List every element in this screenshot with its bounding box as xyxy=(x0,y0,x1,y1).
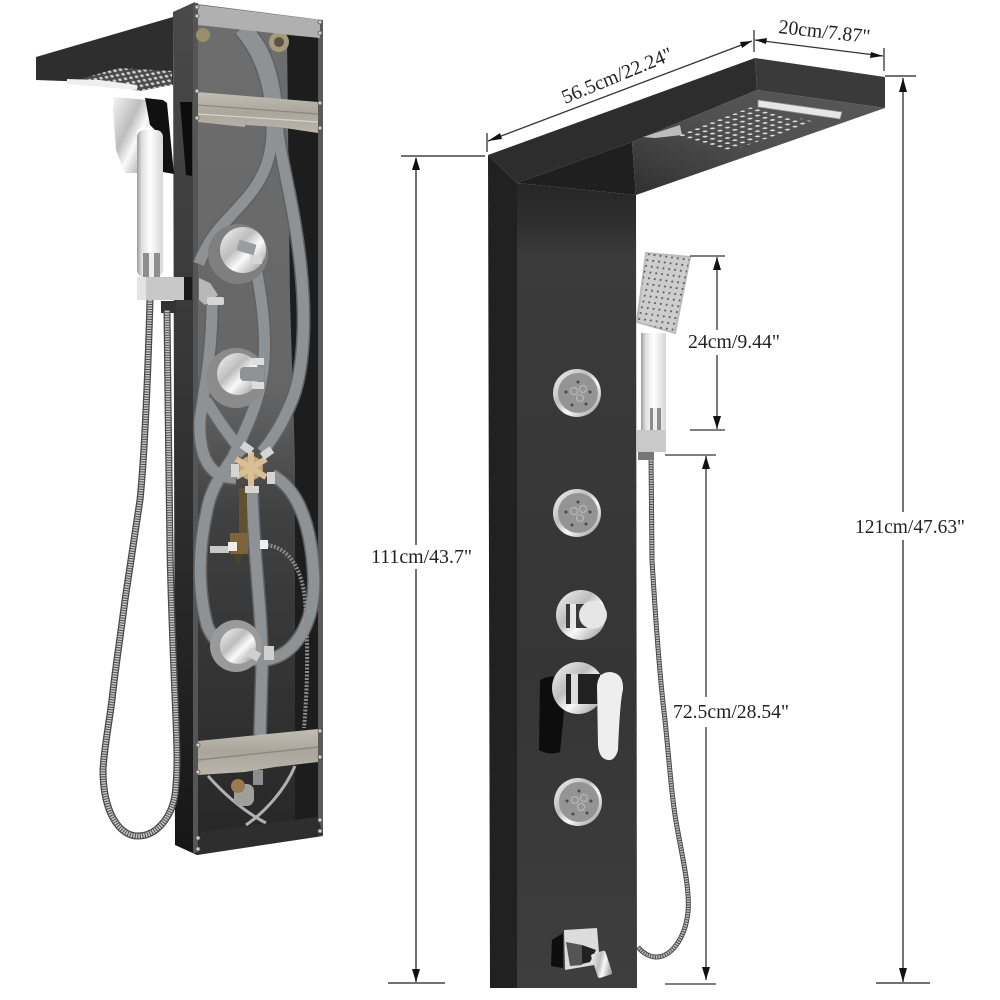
right view: round knob valve xyxy=(556,590,607,640)
dimension: 72.5cm/28.54": 72.5cm/28.54" xyxy=(673,701,789,723)
screws xyxy=(195,5,322,851)
right view: shower panel body xyxy=(488,58,885,988)
left view: side reflection xyxy=(180,102,192,176)
right view: body jet 3 xyxy=(554,778,602,826)
right view: lever mixing valve xyxy=(539,662,623,760)
rain nozzles xyxy=(677,107,815,152)
left view: open back of panel xyxy=(173,2,323,855)
left view: hand shower xyxy=(113,97,192,313)
dimension: 24cm/9.44" xyxy=(688,256,780,430)
inlet fittings xyxy=(196,28,289,52)
chrome rain corner xyxy=(643,125,682,138)
head front edge xyxy=(755,58,885,108)
top bracket xyxy=(198,92,318,133)
right frame edge xyxy=(318,20,323,836)
brass cross fitting xyxy=(231,441,275,493)
waterfall bar xyxy=(758,100,842,119)
panel side wall xyxy=(173,2,197,855)
panel front xyxy=(517,183,637,988)
left view: rain shower head xyxy=(36,17,173,91)
dimension: 111cm/43.7" xyxy=(371,156,485,983)
panel side xyxy=(488,155,517,988)
head underside xyxy=(632,90,885,195)
dimension: 56.5cm/22.24": 56.5cm/22.24" xyxy=(559,43,676,109)
left frame edge xyxy=(193,3,198,853)
upper connector xyxy=(199,278,224,305)
dimension: 20cm/7.87" xyxy=(755,16,884,71)
diverter stem and mixing valve xyxy=(210,488,268,566)
hoses xyxy=(199,30,314,735)
right view: hand shower xyxy=(637,253,690,460)
bottom bracket xyxy=(198,729,318,775)
lower flex hoses and brass connector xyxy=(208,766,295,825)
dark right channel xyxy=(287,35,320,835)
bottom cover strip xyxy=(197,817,323,855)
lower hose clamps xyxy=(246,646,274,661)
right view: flexible hose xyxy=(638,455,688,957)
dimension: 121cm/47.63" xyxy=(855,76,965,983)
right view: body jet 2 xyxy=(553,489,601,537)
lower valve xyxy=(210,620,262,672)
right view: bottom spout xyxy=(551,928,613,979)
neck shadow xyxy=(517,142,636,195)
dimension: 24cm/9.44": 24cm/9.44" xyxy=(688,331,780,353)
dimension: 56.5cm/22.24" xyxy=(487,30,754,152)
dimension: 111cm/43.7": 111cm/43.7" xyxy=(371,546,472,568)
top cover strip xyxy=(198,5,320,38)
valve 2 xyxy=(206,348,266,408)
right view: body jet 1 xyxy=(553,369,601,417)
valve 1 xyxy=(208,224,268,284)
dimension: 72.5cm/28.54" xyxy=(665,455,789,984)
left view: flexible hose xyxy=(103,300,177,836)
panel interior back plate xyxy=(197,4,323,855)
dimension: 20cm/7.87": 20cm/7.87" xyxy=(777,16,871,48)
dimension: 121cm/47.63": 121cm/47.63" xyxy=(855,516,965,538)
head top surface xyxy=(488,58,757,183)
